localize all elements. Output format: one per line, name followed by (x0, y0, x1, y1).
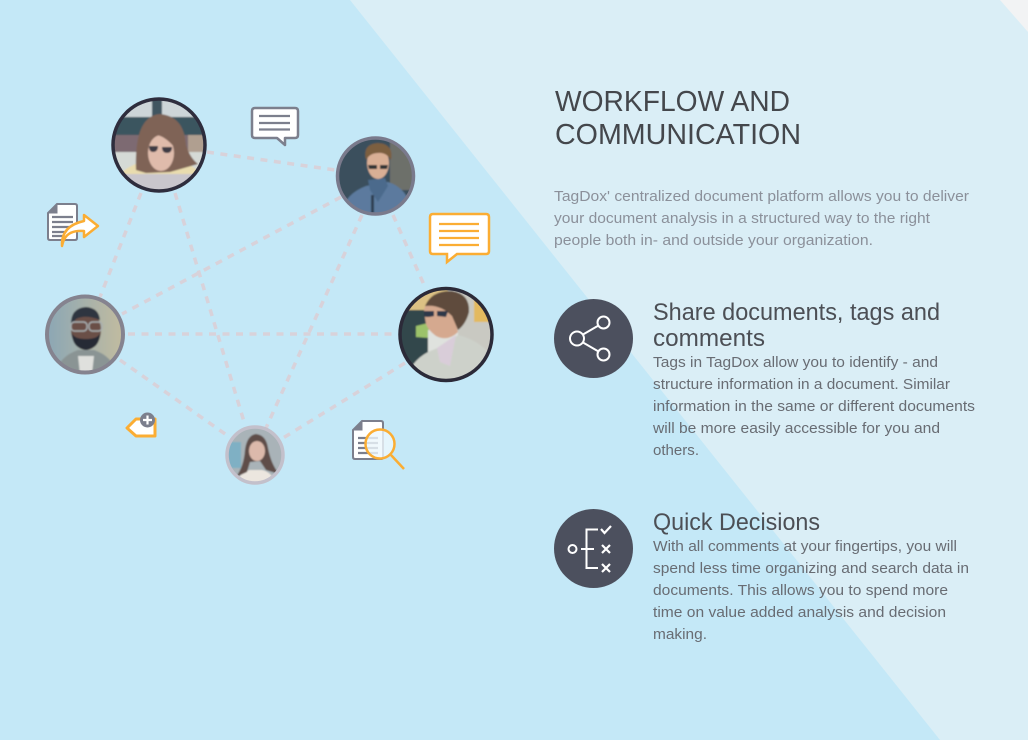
icon: quick decisions (554, 509, 633, 588)
title: WORKFLOW AND (555, 86, 790, 118)
text block: quick decisions (653, 538, 969, 643)
text block: quick decisions: time on value added analysis and decision (653, 604, 946, 621)
heading: quick decisions: Quick Decisions (653, 509, 820, 536)
intro paragraph: people both in- and outside your organization. (554, 232, 873, 249)
text block: quick decisions: With all comments at your fingertips, you will (653, 538, 957, 555)
text block: share documents: will be more easily accessible for you and (652, 420, 940, 437)
text block: share documents: information in the same or different documents (653, 398, 975, 415)
heading: share documents (653, 299, 940, 352)
text block: share documents (652, 354, 975, 459)
icon: orange comment bubble (430, 214, 489, 262)
icon: search document (353, 421, 404, 469)
avatar: man in blue shirt (336, 136, 416, 216)
avatar: man in light jacket (398, 286, 496, 384)
icon: share (554, 299, 633, 378)
text block: quick decisions: making. (653, 626, 707, 643)
heading: share documents: comments (653, 325, 765, 352)
intro paragraph: your document analysis in a structured way to the right (554, 210, 931, 227)
text block: quick decisions: spend less time organizing and search data in (653, 560, 969, 577)
avatar: bearded man with glasses (45, 295, 125, 375)
icon: grey comment bubble (252, 108, 298, 145)
text block: share documents: others. (653, 442, 699, 459)
text block: share documents: Tags in TagDox allow you to identify - and (653, 354, 938, 371)
avatar: woman with long hair (225, 425, 285, 485)
icon: share document (48, 204, 98, 246)
title: COMMUNICATION (555, 119, 801, 151)
text block: quick decisions: documents. This allows you to spend more (653, 582, 948, 599)
icon: add tag (127, 412, 155, 436)
intro paragraph: TagDox' centralized document platform allows you to deliver (554, 188, 969, 205)
heading: share documents: Share documents, tags and (653, 299, 940, 326)
avatar: woman with glasses at laptop (110, 96, 210, 196)
intro paragraph (554, 188, 969, 249)
network connections (100, 152, 425, 438)
text block: share documents: structure information in a document. Similar (653, 376, 950, 393)
title (555, 86, 801, 151)
